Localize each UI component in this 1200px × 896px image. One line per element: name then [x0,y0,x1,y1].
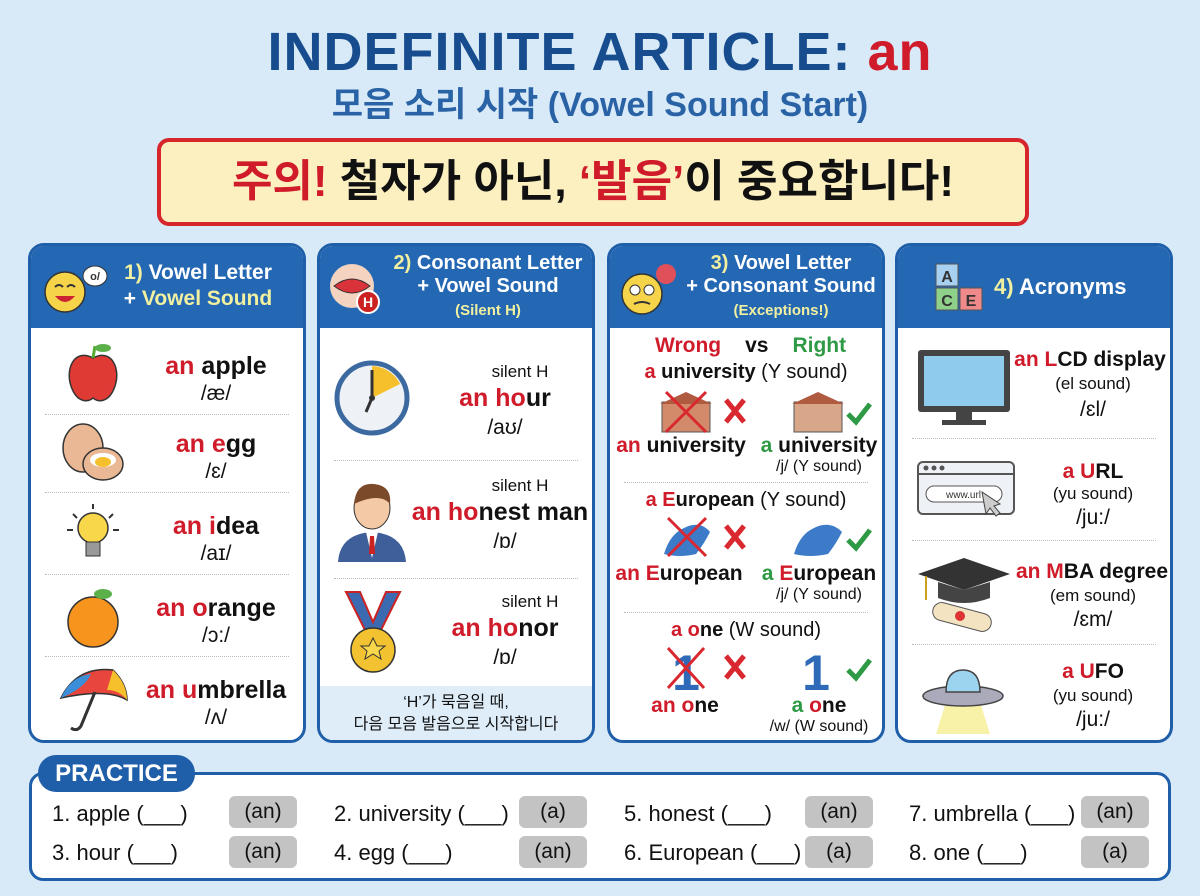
example: European [615,489,876,603]
item: honor: silent H [502,592,558,611]
panel header 2: 2) Consonant Letter [394,252,582,274]
panel header 1 [31,246,303,328]
item: idea: /aɪ/ [201,542,231,565]
example: one [651,619,872,735]
panel: practice: (an) [1096,800,1134,823]
icon: apple [68,344,118,402]
warning banner: 주의! 철자가 아닌, ‘발음’이 중요합니다! [232,157,954,206]
panel header 3: + Consonant Sound [686,275,876,297]
panel header 3: 3) Vowel Letter [711,252,851,274]
item: LCD: an LCD display [1014,348,1166,371]
panel: practice: (a) [1102,840,1128,863]
example: university: a university (Y sound) [644,361,848,383]
item: egg [62,423,256,483]
icon: university right [792,392,872,432]
item: honor [344,591,558,673]
item: honest man: /ɒ/ [493,530,517,553]
note: silent H: 다음 모음 발음으로 시작합니다 [354,716,558,733]
panel: practice: (an) [244,840,282,863]
panel: practice: 4. egg (___) [334,840,453,865]
icon: one wrong [667,645,746,694]
item: apple [68,344,267,405]
icon: letter blocks [936,264,982,310]
icon: smiling face: o/ [90,271,100,283]
item: honest man: silent H [492,476,548,495]
panel: practice: 1. apple (___) [52,801,188,826]
item: honor: an honor [452,614,558,642]
item: idea: an idea [173,512,259,540]
item: UFO: a UFO [1062,660,1124,683]
example: one: a one (W sound) [671,619,821,641]
panel header 4 [898,246,1170,328]
panel header 4: 4) Acronyms [994,274,1126,299]
icon: man [338,484,406,562]
item: LCD [918,348,1166,425]
panel: 2 silent H [317,243,595,743]
item: umbrella: /ʌ/ [205,706,227,729]
icon: browser [917,461,1015,517]
example: European: /j/ (Y sound) [776,586,862,603]
item: honor: /ɒ/ [493,646,517,669]
icon: lips with H: H [363,294,373,310]
item: orange: an orange [156,594,276,622]
icon: medal [344,591,402,673]
icon: letter blocks: C [941,293,953,310]
panel: practice: 3. hour (___) [52,840,178,865]
heading: wrong vs right: Wrong vs Right [655,334,846,357]
panel header 1: 1) Vowel Letter [124,261,272,284]
item: honest man [338,476,588,562]
item: LCD: /ɛl/ [1080,398,1106,421]
panel header 3: (Exceptions!) [733,302,828,319]
icon: letter blocks: A [941,269,953,286]
item: apple: /æ/ [201,382,231,405]
item: umbrella: an umbrella [146,676,286,704]
icon: umbrella [60,668,128,732]
panel header 1: + Vowel Sound [124,287,272,310]
icon: university wrong [660,391,746,433]
icon: smiling face [44,266,108,313]
item: egg: an egg [176,430,256,458]
icon: europe right [794,524,872,556]
panel: practice: (a) [826,840,852,863]
panel: practice: 7. umbrella (___) [909,801,1075,826]
example: university: a university [761,434,877,457]
example: European: an European [615,562,743,585]
icon: monitor [918,350,1010,425]
example: European: a European [762,562,876,585]
item: URL: /ju:/ [1076,506,1110,529]
panel: practice [29,772,1171,881]
item: hour: silent H [492,362,548,381]
panel: practice: 5. honest (___) [624,801,772,826]
icon: UFO [922,669,1004,734]
icon: grad cap [918,558,1010,632]
subtitle: 모음 소리 시작 (Vowel Sound Start) [332,86,868,124]
practice label: PRACTICE [55,760,178,787]
icon: browser: www.url [945,490,981,501]
item: MBA: (em sound) [1050,586,1136,605]
icon: orange [67,589,119,648]
note: silent H: ‘H’가 묵음일 때, [403,694,509,711]
example: university: /j/ (Y sound) [776,458,862,475]
item: hour: /aʊ/ [487,416,523,439]
item: idea [67,504,260,565]
item: apple: an apple [165,352,267,380]
item: umbrella [60,668,286,732]
icon: egg [62,423,124,481]
title: INDEFINITE ARTICLE: an [267,22,932,82]
item: URL: (yu sound) [1053,484,1133,503]
icon: letter blocks: E [966,293,977,310]
panel: 3 exceptions [607,243,885,743]
practice label [38,755,195,792]
example: university [616,361,878,475]
item: egg: /ɛ/ [205,460,227,483]
panel: practice: 6. European (___) [624,840,801,865]
panel: practice: 2. university (___) [334,801,509,826]
item: MBA [918,558,1168,632]
panel: practice: (an) [244,800,282,823]
example: one: an one [651,694,719,717]
panel header 2 [320,246,592,328]
item: URL [917,460,1133,529]
icon: confused face [621,264,676,315]
panel: 4 acronyms [895,243,1173,743]
example: one: a one [792,694,846,717]
item: URL: a URL [1063,460,1123,483]
note: silent H [320,686,592,746]
panel: 1 vowel letter [28,243,306,743]
example: European: a European (Y sound) [646,489,846,511]
item: orange: /ɔ:/ [202,624,230,647]
item: honest man: an honest man [412,498,588,526]
item: UFO [922,660,1133,734]
item: hour: an hour [459,384,551,412]
item: UFO: (yu sound) [1053,686,1133,705]
icon: clock [334,360,410,436]
icon: lips with H [330,264,380,314]
panel header 2: + Vowel Sound [417,275,559,297]
item: MBA: /ɛm/ [1074,608,1112,631]
item: UFO: /ju:/ [1076,708,1110,731]
panel: practice: (a) [540,800,566,823]
example: one: /w/ (W sound) [770,718,868,735]
warning banner [157,138,1029,226]
panel header 2: (Silent H) [455,302,521,319]
panel header 3 [610,246,882,328]
icon: light bulb [67,504,119,556]
panel: practice: (an) [820,800,858,823]
icon: one right [802,645,872,694]
example: university: an university [616,434,746,457]
item: MBA: an MBA degree [1016,560,1168,583]
item: LCD: (el sound) [1055,374,1131,393]
item: orange [67,589,276,648]
panel: practice: (an) [534,840,572,863]
icon: europe wrong [664,517,746,557]
panel: practice: 8. one (___) [909,840,1028,865]
item: hour [334,360,551,439]
